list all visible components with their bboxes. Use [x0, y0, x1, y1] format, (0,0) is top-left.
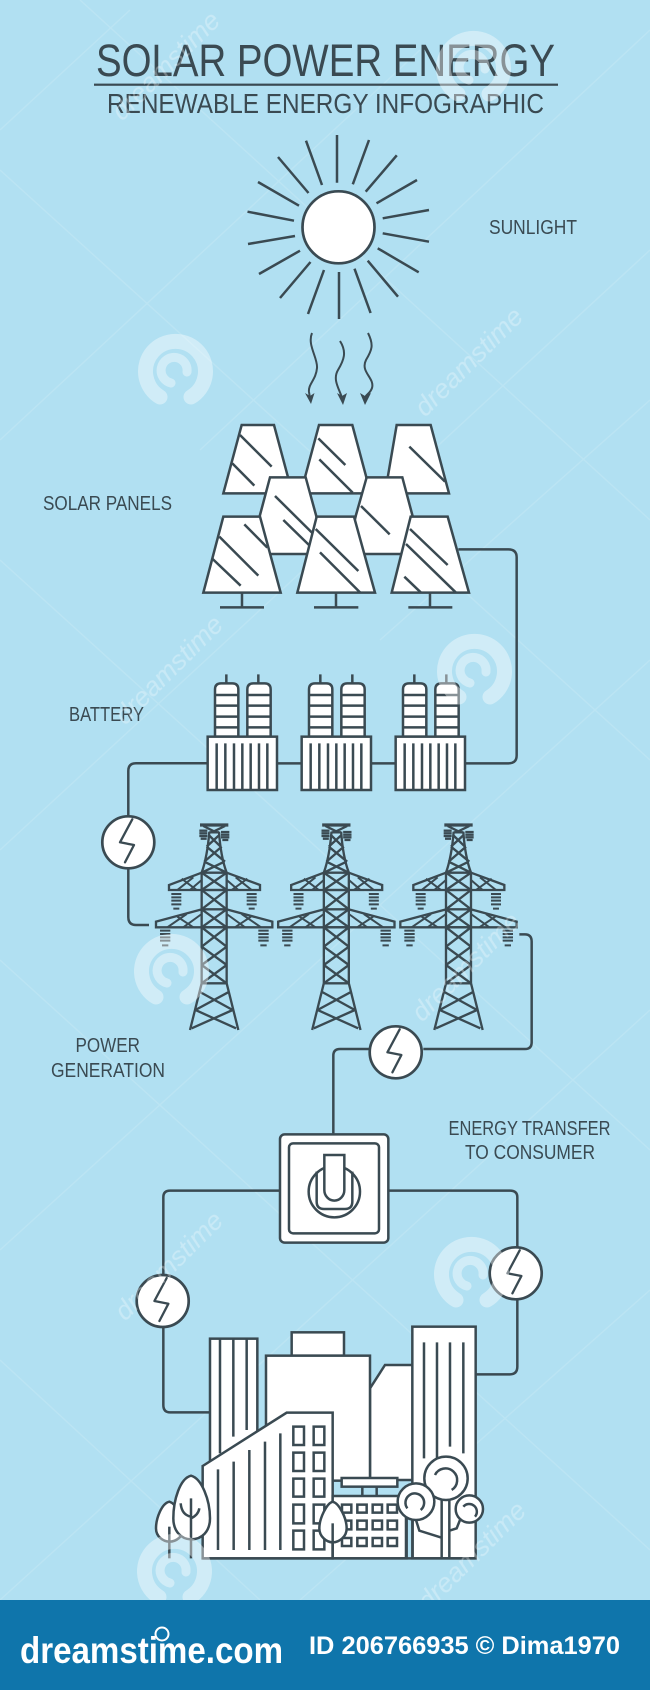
round trees: [398, 1457, 483, 1558]
back row panels: [223, 425, 449, 493]
icon: energy meter: [102, 816, 154, 868]
tree center: [319, 1502, 347, 1558]
energy transfer label: TO CONSUMER: [465, 1142, 595, 1164]
transformer 3: [396, 674, 465, 790]
power generation label: [51, 1035, 165, 1082]
icon: sun: [248, 135, 429, 319]
solar panels label: SOLAR PANELS: [43, 493, 172, 515]
wires: switch to city: [163, 1191, 517, 1412]
watermarks: dreamstime: [411, 1495, 532, 1616]
energy transfer label: ENERGY TRANSFER: [448, 1118, 610, 1140]
front row panels: [203, 517, 469, 607]
arrows: sun rays to panels: [305, 333, 372, 405]
icon: energy meter: [370, 1026, 422, 1078]
solar panels: [203, 425, 517, 763]
power switch: [280, 1134, 388, 1243]
wire: battery to towers: [128, 763, 208, 925]
watermarks: dreamstime: [108, 1205, 229, 1326]
watermarks: dreamstime: [408, 301, 529, 422]
battery transformers: [208, 674, 465, 790]
title: SOLAR POWER ENERGY: [96, 35, 555, 86]
watermarks: dreamstime: [405, 906, 526, 1027]
footer logo spiral: [156, 1628, 168, 1640]
switch and city: [156, 1134, 517, 1558]
transformer 1: [208, 674, 277, 790]
tower 1: [156, 825, 272, 1030]
power generation label: GENERATION: [51, 1060, 165, 1082]
icon: energy meter: [137, 1275, 189, 1327]
sunlight label: SUNLIGHT: [489, 217, 577, 239]
footer bar: [0, 1600, 650, 1690]
footer id: ID 206766935 © Dima1970: [309, 1632, 620, 1660]
transformer 2: [302, 674, 371, 790]
building: low block: [333, 1478, 407, 1558]
title underline: [94, 84, 558, 86]
ground line: [203, 1555, 476, 1562]
watermarks: dreamstime: [105, 5, 226, 126]
building: right tower: [412, 1327, 476, 1558]
wire: towers to switch: [333, 934, 532, 1133]
tower 3: [400, 825, 517, 1030]
wire: panels to battery: [458, 549, 517, 763]
icon: energy meter: [490, 1247, 542, 1299]
building: front slanted: [203, 1413, 333, 1558]
trees left: [156, 1476, 210, 1558]
middle row panels: [250, 477, 422, 554]
power towers: [156, 825, 532, 1133]
footer logo: dreamstime.com: [20, 1630, 283, 1671]
building: left tower: [210, 1339, 257, 1465]
energy transfer label: [448, 1118, 610, 1164]
power generation label: POWER: [76, 1035, 140, 1057]
subtitle: RENEWABLE ENERGY INFOGRAPHIC: [107, 88, 544, 119]
battery label: BATTERY: [69, 704, 144, 726]
building: rear block: [266, 1332, 417, 1481]
tower 2: [278, 825, 394, 1030]
watermarks: [105, 5, 532, 1616]
watermarks: dreamstime: [108, 609, 229, 730]
connecting wires: [277, 760, 396, 767]
